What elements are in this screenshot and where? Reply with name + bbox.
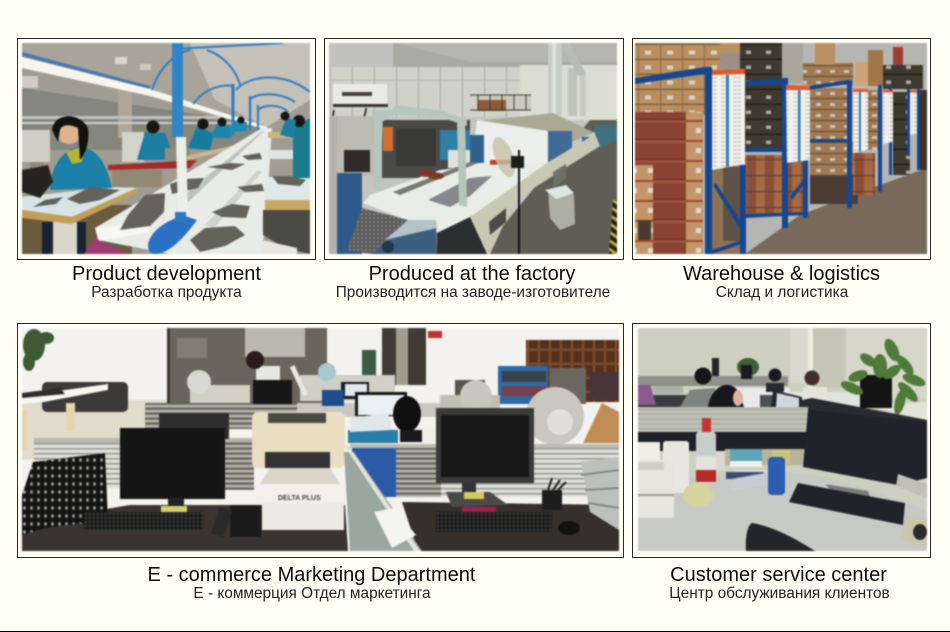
- silver partition: [638, 407, 808, 432]
- machine base: [470, 134, 600, 254]
- pigeonhole shelf: [526, 340, 619, 402]
- mesh file holder: [22, 453, 108, 535]
- plant: [23, 329, 54, 371]
- photo: customer service office: [637, 327, 928, 552]
- photo frame: customer service: [632, 323, 931, 558]
- subheading: customer service center: Центр обслуживания клиентов: [669, 585, 890, 602]
- potted plant: [839, 337, 927, 416]
- right dark partition: [802, 398, 927, 440]
- stacked white boxes with label: [256, 484, 344, 530]
- overhead pipes: [548, 43, 586, 116]
- subheading: product development: Разработка продукта: [91, 284, 242, 301]
- mesh feed and front frame: [347, 208, 408, 254]
- rolls of labels: [638, 441, 689, 493]
- background plant and monitor: [712, 358, 759, 379]
- photo frame: factory: [324, 38, 624, 260]
- shoe upper pieces: [33, 153, 306, 252]
- photo: sewing production line: [21, 42, 311, 255]
- back partition row and sofa: [22, 375, 500, 450]
- panel: customer service center: [632, 323, 931, 602]
- conveyor table: [363, 163, 548, 233]
- stacked white boxes with label: DELTA PLUS: [278, 495, 321, 502]
- pen cup and letter tray: [542, 457, 619, 530]
- back top stacks: [635, 43, 923, 89]
- main worker: [22, 116, 112, 198]
- red table: [108, 160, 197, 170]
- blue overhead arches: [152, 43, 310, 135]
- panel: warehouse and logistics: [632, 38, 931, 301]
- right side tables and workers: [265, 177, 310, 201]
- pale arch frame: [372, 105, 467, 207]
- sewing machine: [22, 130, 50, 162]
- photo frame: marketing department: [17, 323, 624, 558]
- beige laser printer: [252, 412, 345, 490]
- photo: open office desks: [21, 327, 620, 552]
- tunnel oven: [470, 113, 595, 178]
- laptop: [771, 390, 802, 409]
- keyboard and telephone: [84, 505, 261, 537]
- glass divider: [344, 452, 422, 551]
- office chair: [746, 523, 815, 551]
- employee and blue files: [348, 392, 436, 443]
- panel: produced at the factory: [324, 38, 624, 301]
- central conveyor trays: [95, 128, 272, 254]
- blue support pole and foot: [148, 43, 197, 254]
- glass room: [167, 328, 327, 403]
- shoe display racks: [455, 366, 619, 404]
- right monitor: [436, 408, 534, 512]
- interior of machinery: [329, 116, 470, 178]
- heading: produced at the factory: Produced at the factory: [369, 263, 575, 285]
- desk surface: [638, 472, 927, 551]
- right keyboard and mouse: [436, 512, 580, 535]
- photo: warehouse shelving with boxes: [634, 42, 928, 255]
- door and back wall: [362, 328, 442, 385]
- heading: customer service center: Customer service center: [670, 564, 887, 586]
- heading: product development: Product development: [72, 263, 261, 285]
- mouse pad: [900, 515, 927, 548]
- back partitions and desks: [638, 376, 860, 409]
- shoes on conveyor: [418, 169, 444, 180]
- subheading: e-commerce marketing department: Е - коммерция Отдел маркетинга: [193, 585, 431, 602]
- main slatted partitions: [34, 438, 619, 497]
- first rack stock: [635, 80, 740, 254]
- photo frame: warehouse: [632, 38, 931, 260]
- blue control box: [337, 173, 362, 254]
- power strip: [896, 474, 927, 498]
- water bottle: [696, 418, 716, 484]
- second and third rack stock: [745, 85, 927, 215]
- keyboard: [789, 483, 905, 525]
- railing with boxes: [470, 95, 531, 111]
- seated colleagues: [680, 368, 827, 407]
- panel: e-commerce marketing department: [17, 323, 624, 602]
- subheading: warehouse and logistics: Склад и логистика: [716, 284, 848, 301]
- subheading: produced at the factory: Производится на заводе-изготовителе: [336, 284, 610, 301]
- hazard strip: [609, 200, 617, 254]
- tape roll: [683, 483, 713, 507]
- heading: warehouse and logistics: Warehouse & logistics: [683, 263, 880, 285]
- stool: [545, 185, 575, 230]
- control panel: [333, 84, 388, 156]
- desk items: [712, 449, 805, 490]
- workers in the left row: [122, 116, 247, 162]
- panel: product development: [17, 38, 316, 301]
- photo frame: product development: [17, 38, 316, 260]
- blue rack frames: [635, 67, 920, 254]
- floor and left table: [22, 205, 132, 254]
- distant monitors and fans: [187, 351, 584, 445]
- stock list sheets: [712, 69, 917, 170]
- label printer: [638, 460, 674, 518]
- desk surface: [22, 505, 348, 551]
- heading: e-commerce marketing department: E - commerce Marketing Department: [148, 564, 475, 586]
- floor: [480, 120, 617, 254]
- main monitor: [803, 410, 927, 497]
- blue cup: [768, 457, 785, 495]
- cardboard box: [583, 403, 619, 443]
- photo: shoe factory machinery: [328, 42, 618, 255]
- loose paper: [374, 508, 416, 548]
- black printer and left monitor: [120, 413, 229, 512]
- desk fan: [488, 134, 524, 254]
